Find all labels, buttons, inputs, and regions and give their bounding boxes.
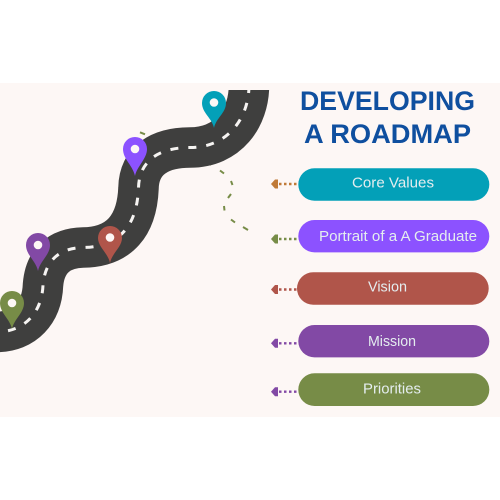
pin: teal [202,91,226,128]
pin: red [98,226,122,263]
pill: mission [298,325,489,357]
pin: bright purple [123,137,147,176]
pill: portrait of a graduate [298,220,489,252]
arrow: portrait [271,234,298,244]
background panel [0,83,500,417]
pill: core values: Core Values [352,175,434,192]
pill: vision [297,272,489,305]
pill: mission: Mission [368,333,416,350]
pill: vision: Vision [368,279,407,296]
title [300,86,475,149]
arrow: vision [271,285,297,294]
road [0,85,249,332]
arrow: mission [271,339,298,348]
arrow: priorities [271,387,298,396]
dashed trail [140,132,248,230]
arrow: core values [271,180,298,188]
pill: priorities: Priorities [363,380,421,397]
pill: core values [298,168,489,201]
pin: violet [26,233,50,271]
pill: portrait of a graduate: Portrait of a A Graduate [319,228,477,245]
pin: green [0,291,24,329]
title: A ROADMAP [304,119,471,149]
title: DEVELOPING [300,86,475,116]
pill: priorities [298,373,489,406]
